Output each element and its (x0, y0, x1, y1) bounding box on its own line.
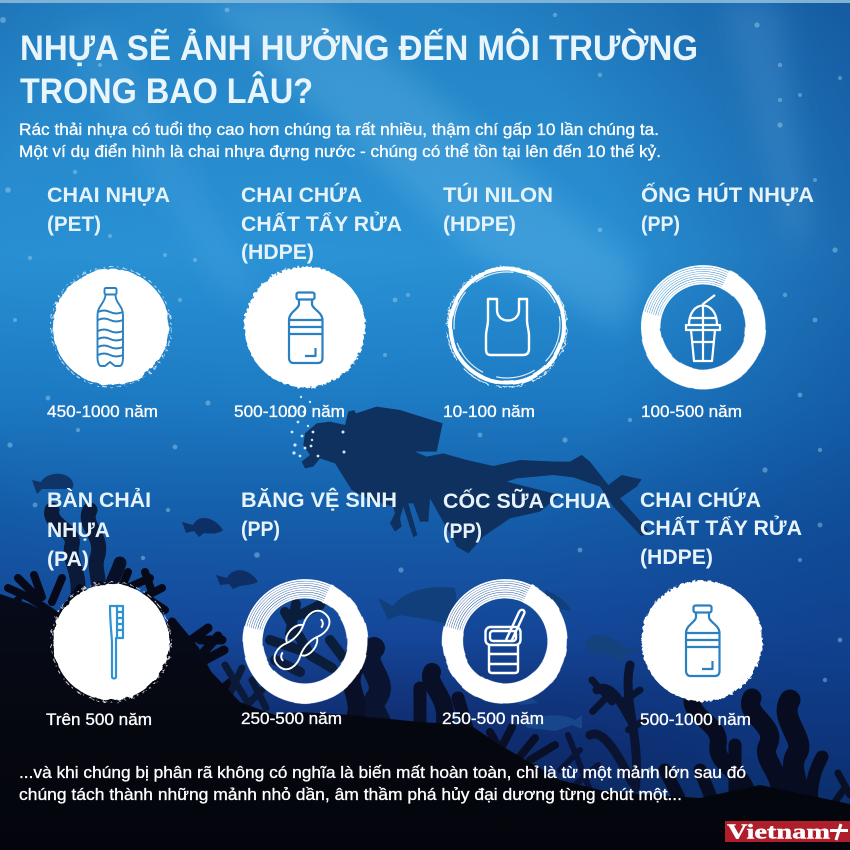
logo: Vietnam+ (725, 820, 850, 844)
title: TRONG BAO LÂU? (20, 71, 313, 111)
item: cốc sữa chua PP: CỐC SỮA CHUA (443, 489, 611, 513)
item: băng vệ sinh PP: 250-500 năm (241, 710, 342, 728)
item: chai chứa chất tẩy rửa HDPE (2): CHAI CHỨA (640, 488, 761, 512)
brush strokes (242, 578, 368, 704)
item: chai chứa chất tẩy rửa HDPE (2): (HDPE) (640, 546, 713, 569)
branch coral centre-left (170, 622, 234, 702)
brush strokes (640, 264, 766, 390)
item: cốc sữa chua PP: (PP) (443, 520, 482, 543)
icon: yogurt cup (486, 610, 524, 673)
icon: sanitary pad (267, 604, 337, 676)
item: chai chứa chất tẩy rửa HDPE: CHẤT TẨY RỬA (241, 212, 402, 236)
item: túi nilon HDPE: (HDPE) (443, 213, 516, 236)
icon: detergent bottle (686, 606, 720, 676)
closing text: ...và khi chúng bị phân rã không có nghĩa là biến mất hoàn toàn, chỉ là từ một mảnh lớn sau đó (19, 764, 746, 782)
item: bàn chải nhựa PA: Trên 500 năm (46, 711, 152, 729)
item: băng vệ sinh PP: (PP) (241, 518, 280, 541)
kelp centre (370, 648, 382, 738)
item: bàn chải nhựa PA (46, 489, 171, 729)
closing text: chúng tách thành những mảnh nhỏ dần, âm thầm phá hủy đại dương từng chút một... (19, 786, 682, 804)
icon: plastic bag (486, 299, 529, 355)
item: chai chứa chất tẩy rửa HDPE (234, 183, 402, 421)
icon: toothbrush (110, 606, 123, 678)
item: chai nhựa PET: (PET) (47, 213, 101, 236)
title: NHỰA SẼ ẢNH HƯỞNG ĐẾN MÔI TRƯỜNG (20, 28, 698, 68)
icon: detergent bottle (289, 292, 322, 363)
coral reef silhouette (0, 510, 850, 850)
item: chai chứa chất tẩy rửa HDPE: CHAI CHỨA (241, 183, 362, 207)
lacy coral (590, 665, 637, 790)
branch coral right of centre (470, 727, 556, 795)
item: ống hút nhựa PP: ỐNG HÚT NHỰA (641, 183, 814, 207)
item: chai nhựa PET: 450-1000 năm (47, 403, 158, 421)
diver bubbles (288, 396, 346, 457)
coral inside ring (270, 604, 345, 672)
item: bàn chải nhựa PA: (PA) (47, 548, 89, 571)
item: bàn chải nhựa PA: BÀN CHẢI (47, 489, 151, 512)
diver silhouette (302, 407, 648, 553)
item: ống hút nhựa PP: (PP) (641, 213, 680, 236)
logo: Vietnam+: Vietnam (727, 820, 831, 844)
item: ống hút nhựa PP (633, 183, 814, 421)
intro text: Rác thải nhựa có tuổi thọ cao hơn chúng ta rất nhiều, thậm chí gấp 10 lần chúng ta. (19, 121, 659, 139)
branch coral left (6, 572, 165, 618)
kelp left (52, 510, 99, 602)
item: chai nhựa PET (47, 184, 171, 421)
title (20, 28, 698, 111)
item: chai nhựa PET: CHAI NHỰA (47, 184, 170, 207)
icon: water bottle (98, 288, 123, 366)
item: túi nilon HDPE (443, 183, 567, 421)
item: chai chứa chất tẩy rửa HDPE: 500-1000 năm (234, 403, 345, 421)
brush strokes (442, 578, 568, 704)
intro text (19, 121, 661, 161)
item: chai chứa chất tẩy rửa HDPE (2): CHẤT TẨY RỬA (640, 516, 802, 540)
item: băng vệ sinh PP: BĂNG VỆ SINH (241, 488, 397, 512)
item: cốc sữa chua PP (435, 489, 611, 728)
kelp right (692, 702, 748, 795)
icon: cup with straw (686, 295, 720, 361)
item: chai chứa chất tẩy rửa HDPE (2): 500-1000 năm (640, 711, 751, 729)
item: chai chứa chất tẩy rửa HDPE (2) (640, 488, 802, 729)
fish silhouettes (32, 474, 638, 731)
item: túi nilon HDPE: 10-100 năm (443, 403, 535, 421)
light rays (60, 0, 810, 330)
item: chai chứa chất tẩy rửa HDPE: (HDPE) (241, 241, 314, 264)
item: cốc sữa chua PP: 250-500 năm (442, 710, 544, 728)
intro text: Một ví dụ điển hình là chai nhựa đựng nước - chúng có thể tồn tại lên đến 10 thế kỷ. (19, 143, 661, 161)
closing text (19, 764, 746, 804)
item: bàn chải nhựa PA: NHỰA (47, 519, 110, 542)
item: băng vệ sinh PP (235, 488, 397, 728)
item: ống hút nhựa PP: 100-500 năm (641, 403, 742, 421)
seabed mass (0, 594, 850, 850)
item: túi nilon HDPE: TÚI NILON (443, 183, 553, 207)
